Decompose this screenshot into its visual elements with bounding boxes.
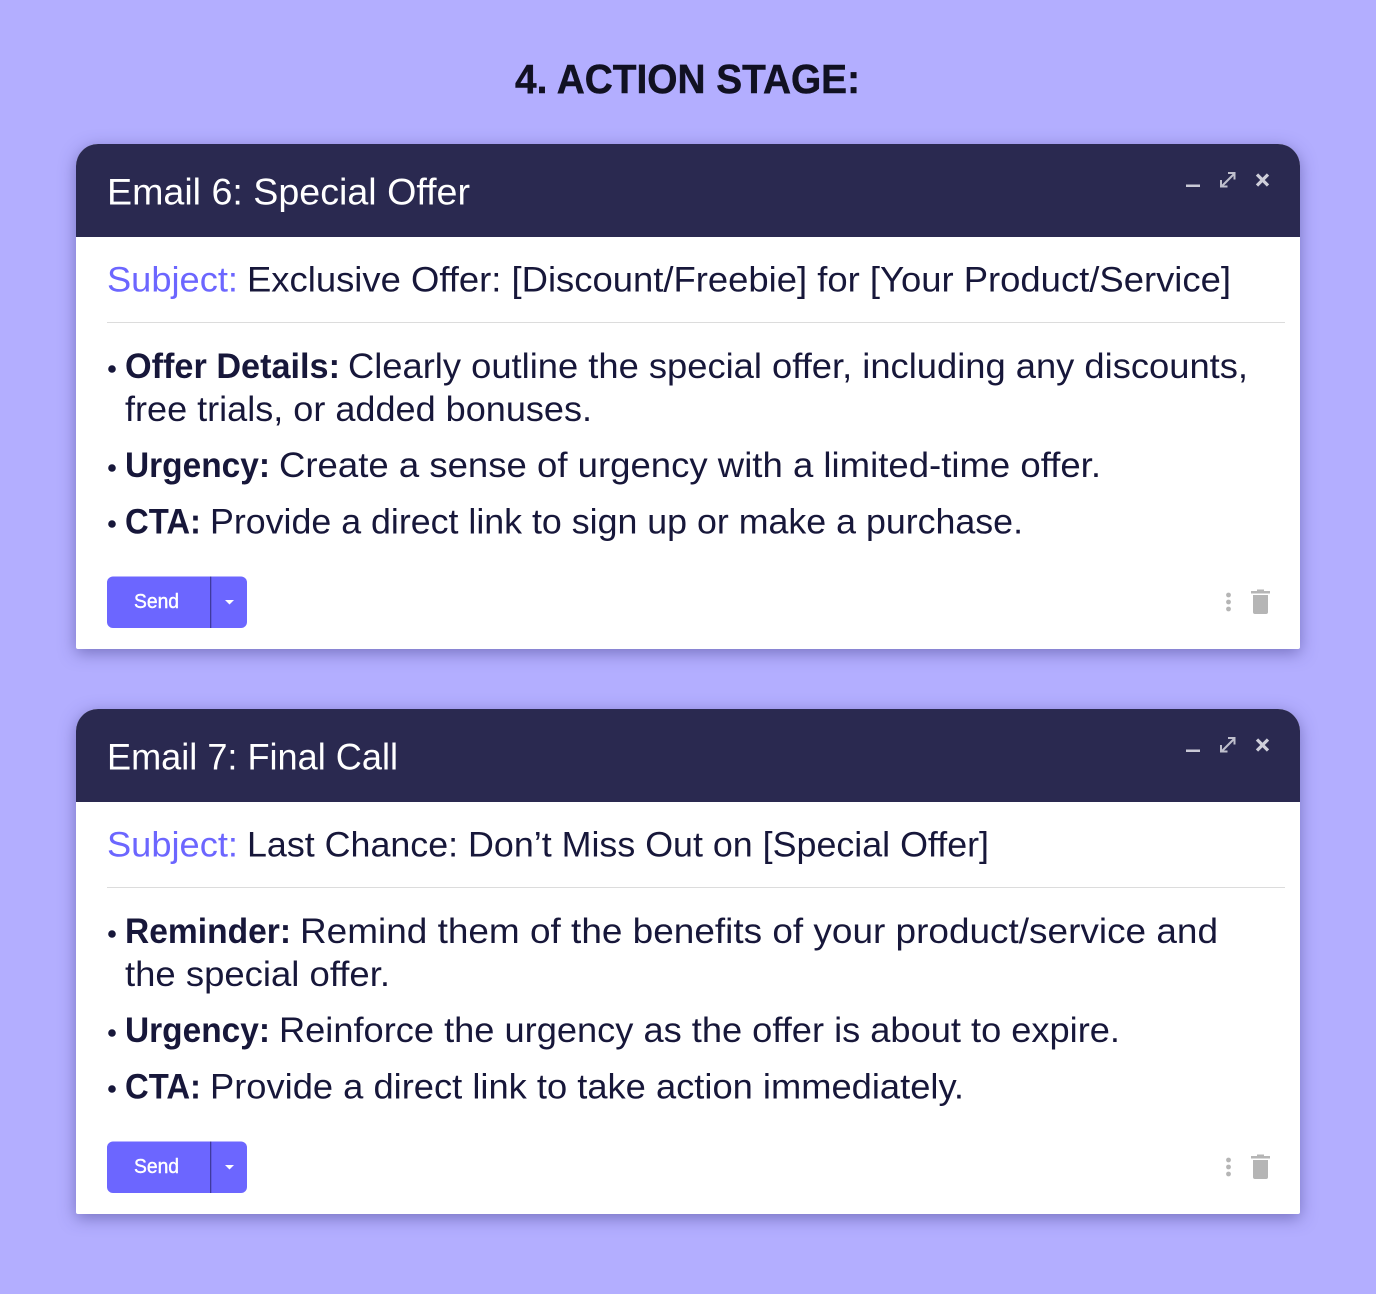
subject line: Last Chance: Don’t Miss Out on [Special Offer] [247, 826, 989, 864]
bullet: urgency: Urgency: [125, 1011, 270, 1050]
icon: more options [1226, 593, 1231, 611]
subject line: Subject: [107, 826, 238, 864]
header bar: Email 7 [76, 709, 1300, 802]
panel: Email 6 Special Offer [76, 144, 1300, 628]
heading: Email 6: Email 6: Special Offer [107, 172, 470, 212]
send button [107, 576, 247, 628]
icon: trash [1251, 590, 1270, 614]
bullet: urgency: Reinforce the urgency as the offer is about to expire. [279, 1011, 1120, 1050]
icon: close [1257, 174, 1268, 186]
email card background: Email 6 [76, 144, 1300, 649]
icon: expand [1221, 738, 1234, 752]
send button [107, 1142, 247, 1193]
heading: Email 7: Email 7: Final Call [107, 736, 398, 778]
bullet: offer details: free trials, or added bonuses. [125, 390, 592, 429]
email card background: Email 7 [76, 709, 1300, 1214]
send button: Send [134, 1156, 179, 1178]
icon: trash [1251, 1154, 1270, 1179]
bullet: reminder: the special offer. [125, 955, 390, 994]
bullet: offer details: Offer Details: [125, 347, 340, 386]
subject line: Exclusive Offer: [Discount/Freebie] for [Your Product/Service] [247, 260, 1231, 300]
panel: Email 7 Final Call [76, 709, 1300, 1193]
bullet: reminder [108, 912, 1218, 994]
bullet: CTA: CTA: [125, 502, 201, 542]
title: 4. ACTION STAGE: [515, 56, 860, 102]
bullet: reminder: Remind them of the benefits of your product/service and [300, 912, 1218, 951]
bullet: urgency: Create a sense of urgency with a limited-time offer. [279, 446, 1101, 485]
subject line: Subject: [107, 260, 238, 300]
icon: expand [1221, 173, 1234, 186]
icon: minimize [1186, 750, 1200, 752]
bullet: offer details: Clearly outline the special offer, including any discounts, [348, 347, 1248, 386]
icon: minimize [1186, 184, 1200, 187]
icon: more options [1226, 1158, 1231, 1176]
bullet: offer details [108, 347, 1248, 429]
bullet: CTA: CTA: [125, 1068, 201, 1106]
bullet: reminder: Reminder: [125, 912, 291, 951]
send button: Send [134, 591, 179, 613]
bullet: CTA: Provide a direct link to take action immediately. [210, 1068, 964, 1106]
header bar: Email 6 [76, 144, 1300, 237]
icon: close [1257, 740, 1268, 750]
bullet: CTA: Provide a direct link to sign up or make a purchase. [210, 502, 1023, 542]
bullet: urgency: Urgency: [125, 446, 270, 485]
